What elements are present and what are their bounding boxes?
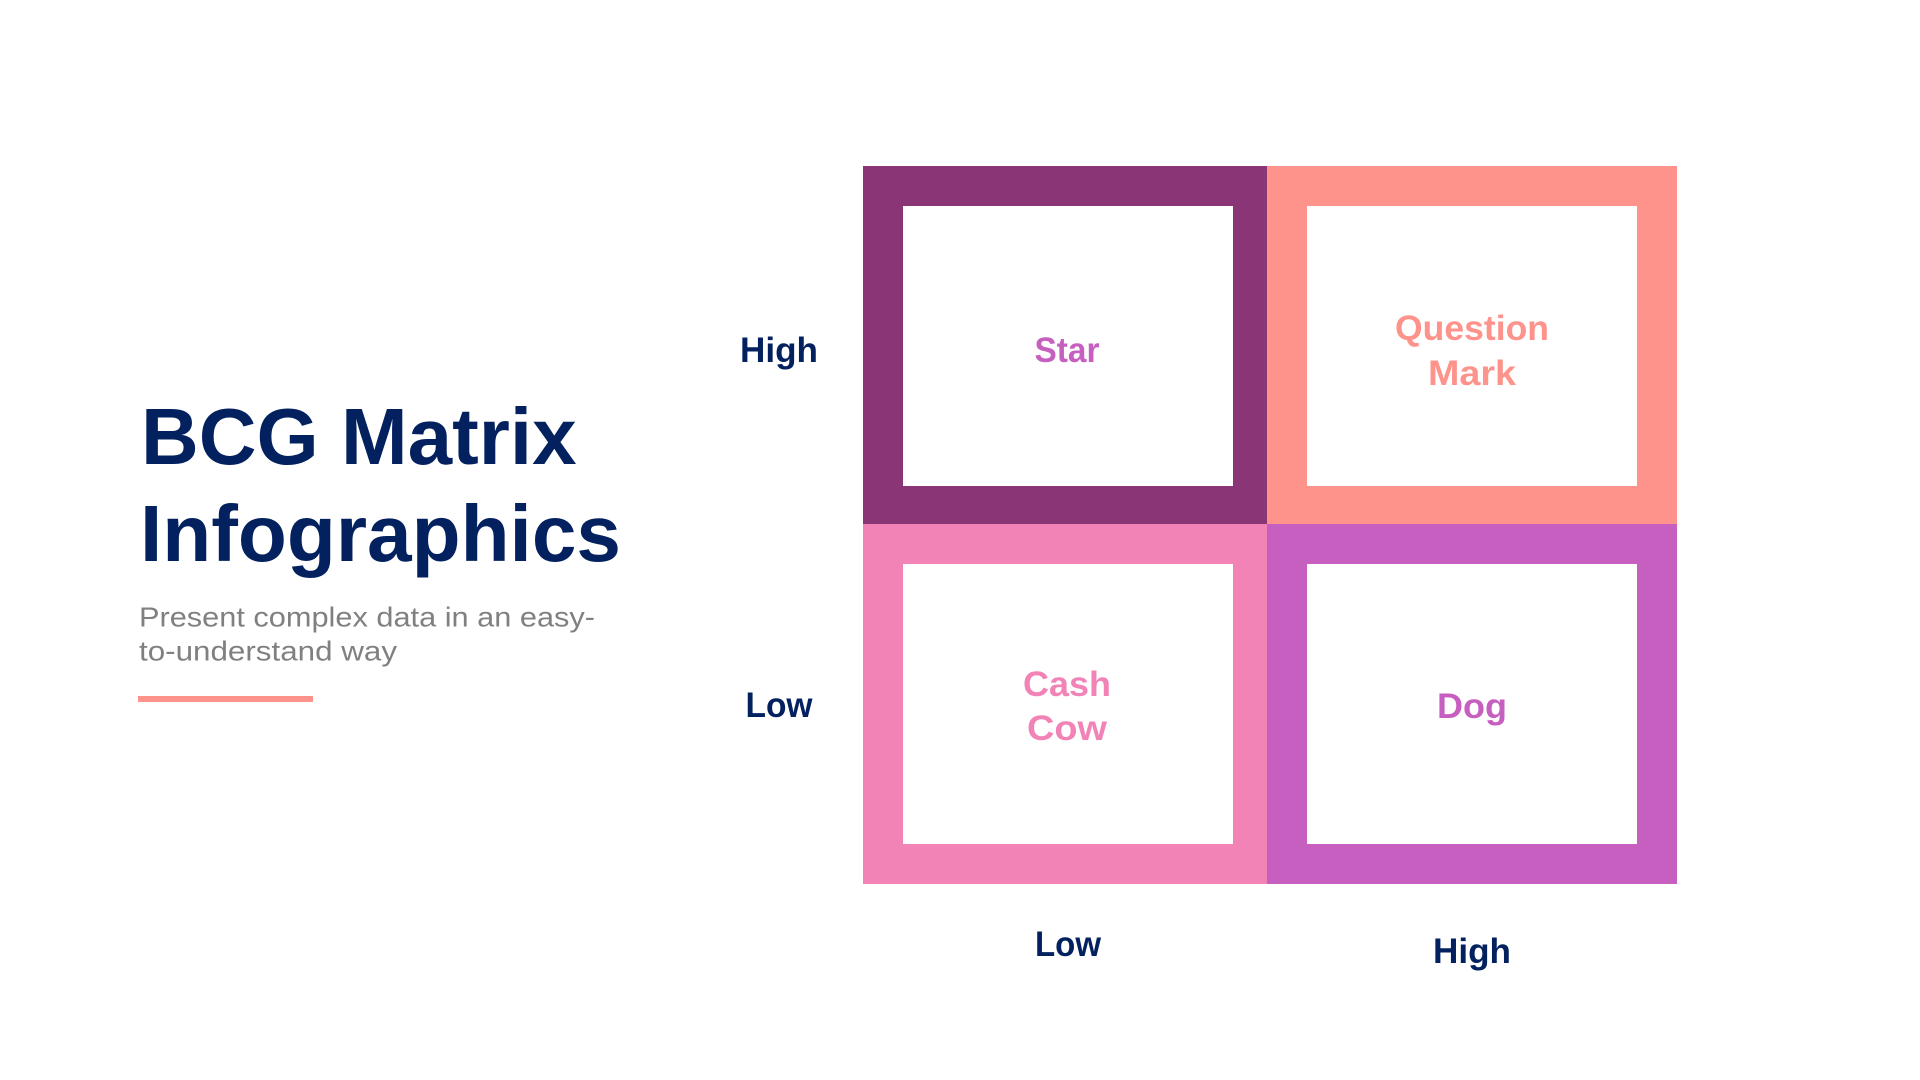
- panel: dog: Dog: [1437, 687, 1507, 726]
- accent underline: [138, 696, 313, 702]
- subtitle text block: [139, 602, 595, 666]
- panel: question mark: Question: [1395, 309, 1549, 348]
- x-axis label: low: Low: [1035, 925, 1102, 964]
- title: BCG Matrix: [141, 392, 577, 481]
- title: Infographics: [140, 489, 621, 578]
- x-axis label: high: High: [1433, 932, 1511, 971]
- title: [140, 392, 621, 578]
- panel: star: Star: [1034, 331, 1100, 370]
- panel: question mark: Mark: [1428, 354, 1517, 393]
- panel: cash cow: Cash: [1023, 665, 1111, 704]
- subtitle text block: to-understand way: [139, 636, 397, 666]
- y-axis label: high: High: [740, 331, 818, 370]
- panel: question mark: [1267, 166, 1677, 524]
- y-axis label: low: Low: [746, 686, 813, 725]
- panel: cash cow: [863, 524, 1267, 884]
- panel: star: [863, 166, 1267, 524]
- panel: cash cow: Cow: [1027, 709, 1108, 748]
- subtitle text block: Present complex data in an easy-: [139, 602, 595, 632]
- panel: dog: [1267, 524, 1677, 884]
- matrix: [863, 166, 1677, 884]
